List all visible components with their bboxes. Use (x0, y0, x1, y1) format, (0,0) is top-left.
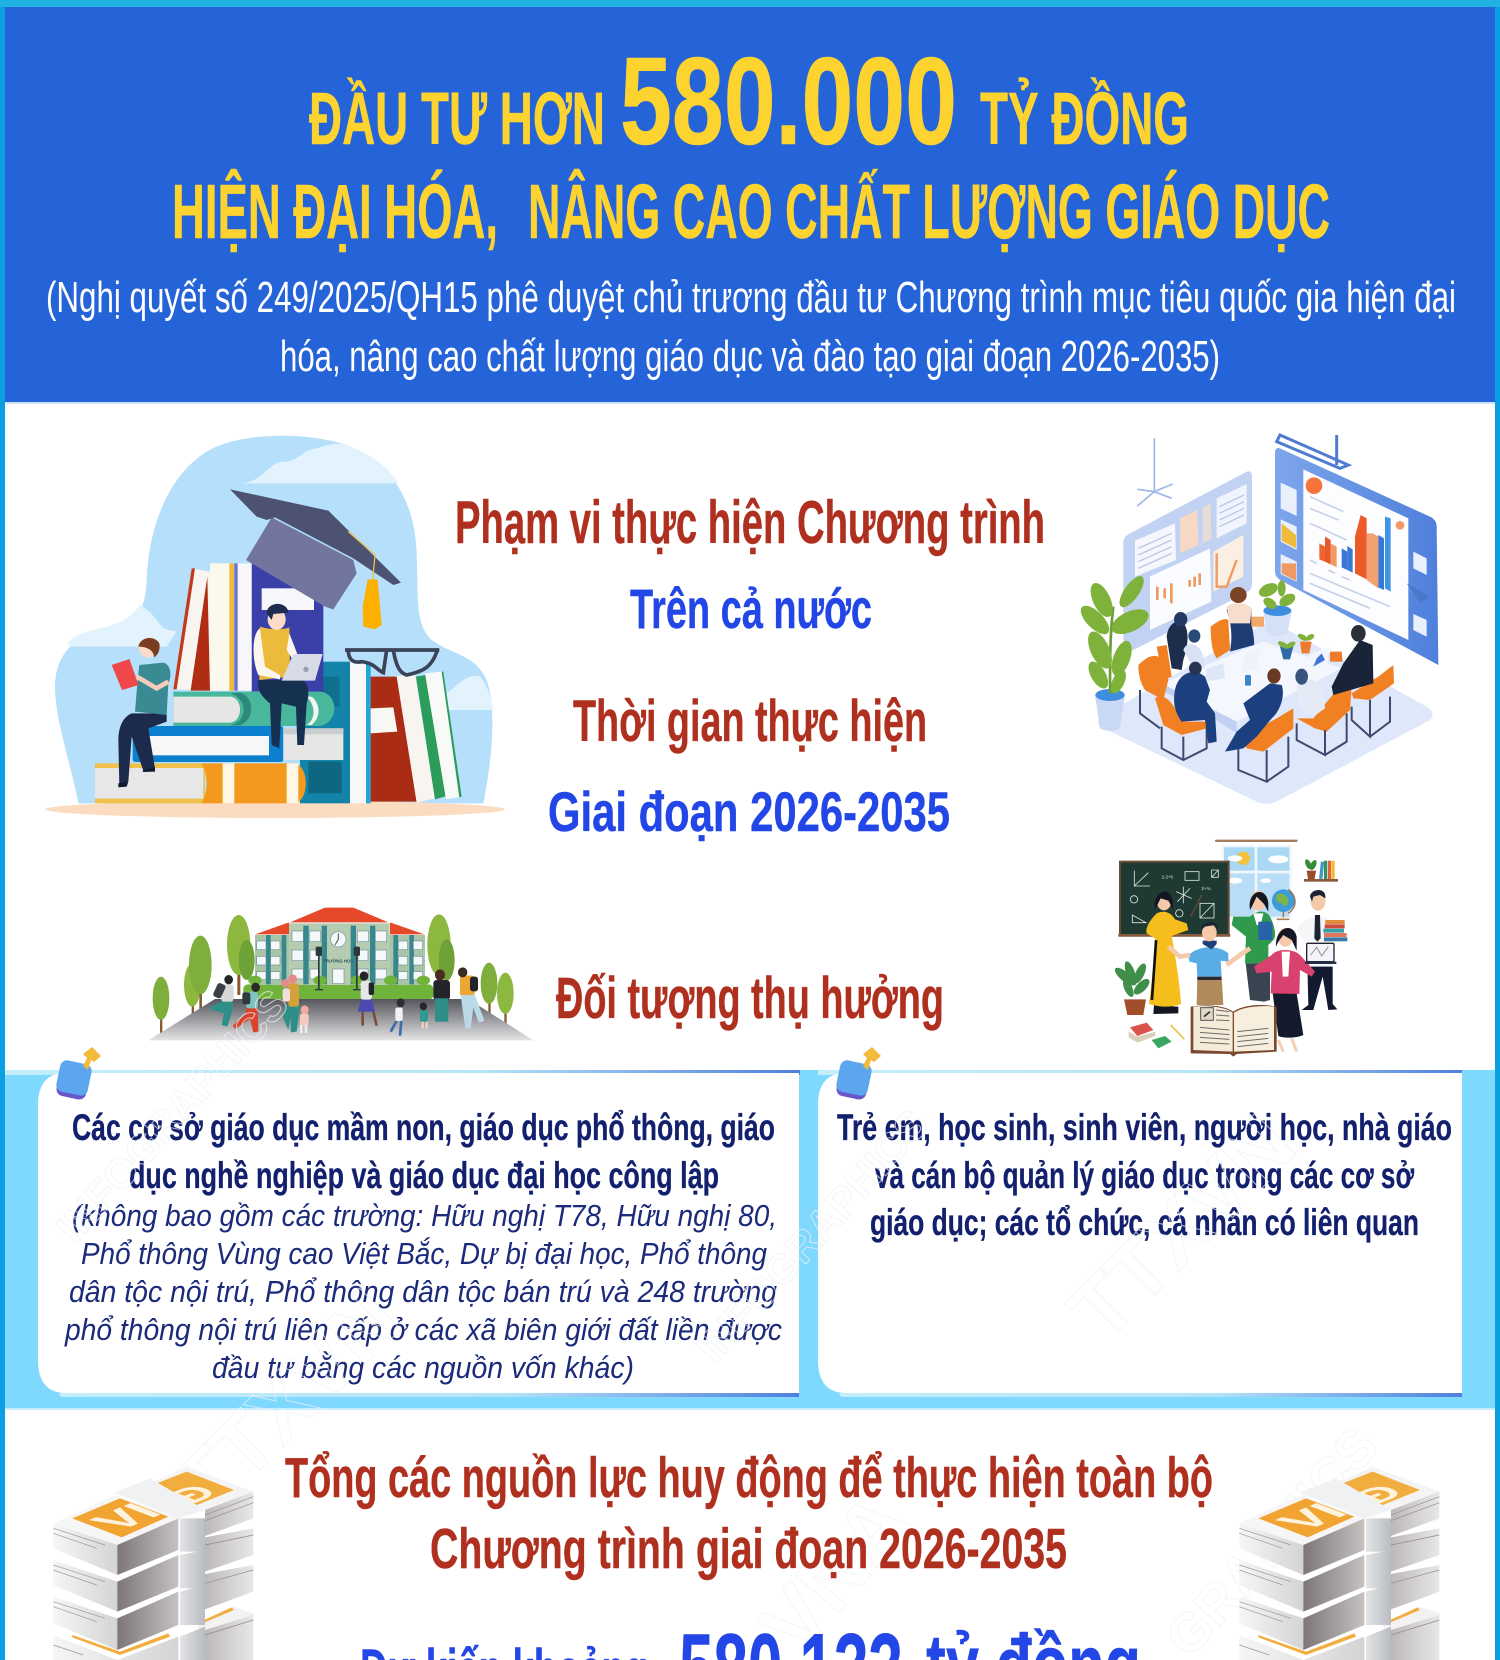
card note (64, 1198, 782, 1385)
card heading (72, 1107, 775, 1196)
illustration: school (148, 908, 533, 1040)
watermark (47, 980, 1390, 1660)
illustration: students on books (45, 436, 505, 818)
stacked blue book (133, 726, 343, 762)
ground (45, 801, 505, 818)
icon: money stack left (53, 1467, 253, 1660)
left wall panel (1123, 471, 1252, 652)
chair legs (1140, 690, 1390, 782)
sky blob (55, 436, 492, 803)
shelf (1304, 858, 1338, 882)
trees (153, 914, 514, 1033)
glasses (345, 650, 439, 675)
back bundle (150, 1467, 253, 1660)
school building: TRƯỜNG HỌC (323, 958, 354, 963)
scope value: Trên cả nước (630, 577, 872, 640)
icon: money stack right (1239, 1467, 1439, 1660)
leaning red book (173, 568, 210, 691)
person with laptop (254, 604, 323, 748)
orange chairs (1138, 619, 1394, 752)
left plant (1076, 572, 1152, 731)
watermark: TTXVN (1051, 1097, 1312, 1358)
school building (255, 908, 425, 985)
books on floor (1129, 1023, 1184, 1048)
meeting table (1162, 632, 1342, 733)
chalkboard: 2+¾ (1201, 886, 1211, 891)
seated team (1167, 612, 1373, 752)
road (148, 999, 533, 1040)
subtitle (46, 273, 1456, 381)
upright purple book (234, 563, 323, 692)
front bundle (53, 1495, 178, 1660)
woman in green (1232, 891, 1275, 1002)
illustration: meeting room (1076, 435, 1438, 804)
right red and green books (371, 672, 462, 803)
bushes and lamps (248, 947, 430, 990)
paper band (1300, 1478, 1391, 1660)
card note: đầu tư bằng các nguồn vốn khác) (212, 1350, 634, 1385)
watermark: INFOGRAPHICS (47, 980, 297, 1251)
right beneficiary card (818, 1047, 1462, 1397)
card text (837, 1107, 1452, 1243)
title line one (309, 33, 1189, 171)
open book (1191, 1005, 1277, 1057)
floor (1098, 620, 1433, 804)
chalkboard: 2-2+6 (1162, 875, 1174, 880)
upright yellow and white book (210, 563, 234, 691)
total amount (360, 1613, 1141, 1660)
paper band (114, 1478, 205, 1660)
ceiling bar (1277, 435, 1348, 468)
resources heading (285, 1446, 1213, 1581)
title line one: 580.000 (620, 33, 957, 171)
left beneficiary card (38, 1047, 799, 1397)
watermark: INFOGRAPHICS (687, 1100, 937, 1371)
card heading: Các cơ sở giáo dục mầm non, giáo dục phổ thông, giáo (72, 1107, 775, 1148)
laptop (1305, 943, 1336, 964)
audience panel band (5, 1070, 1495, 1410)
period value: Giai đoạn 2026-2035 (548, 780, 950, 843)
upright teal book (300, 662, 350, 803)
resources heading: Chương trình giai đoạn 2026-2035 (430, 1517, 1067, 1581)
audience heading: Đối tượng thụ hưởng (556, 966, 944, 1031)
title line two (172, 167, 1330, 255)
card note: phổ thông nội trú liên cấp ở các xã biên giới đất liền được (64, 1312, 782, 1347)
stacked orange book (95, 763, 306, 803)
pupils and parents (210, 967, 482, 1036)
back bundle: Đ (1343, 1480, 1414, 1508)
back bundle: Đ (157, 1480, 228, 1508)
curtain rod and window (1215, 840, 1298, 920)
title line two: HIỆN ĐẠI HÓA, (172, 168, 498, 255)
title line one: TỶ ĐỒNG (980, 77, 1189, 160)
graduation cap (230, 489, 401, 629)
card note: Phổ thông Vùng cao Việt Bắc, Dự bị đại học, Phổ thông (81, 1236, 767, 1271)
center plant (1257, 580, 1298, 637)
teacher in ao dai (1146, 891, 1202, 1014)
card pin icon (55, 1047, 101, 1101)
title line one: ĐẦU TƯ HƠN (309, 77, 605, 160)
front bundle: VI (79, 1498, 173, 1535)
front bundle: VI (1265, 1498, 1359, 1535)
woman in pink (1254, 928, 1315, 1052)
watermark: TTXVN (156, 1272, 417, 1533)
person reading (112, 637, 170, 787)
scope heading: Phạm vi thực hiện Chương trình (455, 489, 1045, 556)
back bundle (1336, 1467, 1439, 1660)
card pin icon (835, 1047, 881, 1101)
stacked green book (173, 692, 334, 726)
right wall panel (1275, 448, 1438, 665)
card heading: dục nghề nghiệp và giáo dục đại học công lập (129, 1155, 719, 1196)
header banner (0, 0, 1500, 404)
card note: dân tộc nội trú, Phổ thông dân tộc bán trú và 248 trường (69, 1274, 777, 1309)
plant (1112, 960, 1152, 1015)
upright white book (350, 662, 371, 803)
illustration: teachers (1112, 840, 1347, 1057)
man in blue polo (1168, 922, 1250, 1005)
period heading: Thời gian thực hiện (573, 689, 927, 754)
globe (1272, 889, 1295, 919)
chalkboard (1118, 862, 1230, 937)
front bundle (1239, 1495, 1364, 1660)
ceiling lamp (1137, 438, 1173, 506)
lawn (243, 984, 433, 1000)
card note: (không bao gồm các trường: Hữu nghị T78, Hữu nghị 80, (72, 1198, 777, 1233)
man with tie (1297, 890, 1347, 1010)
standing woman (1227, 587, 1264, 652)
